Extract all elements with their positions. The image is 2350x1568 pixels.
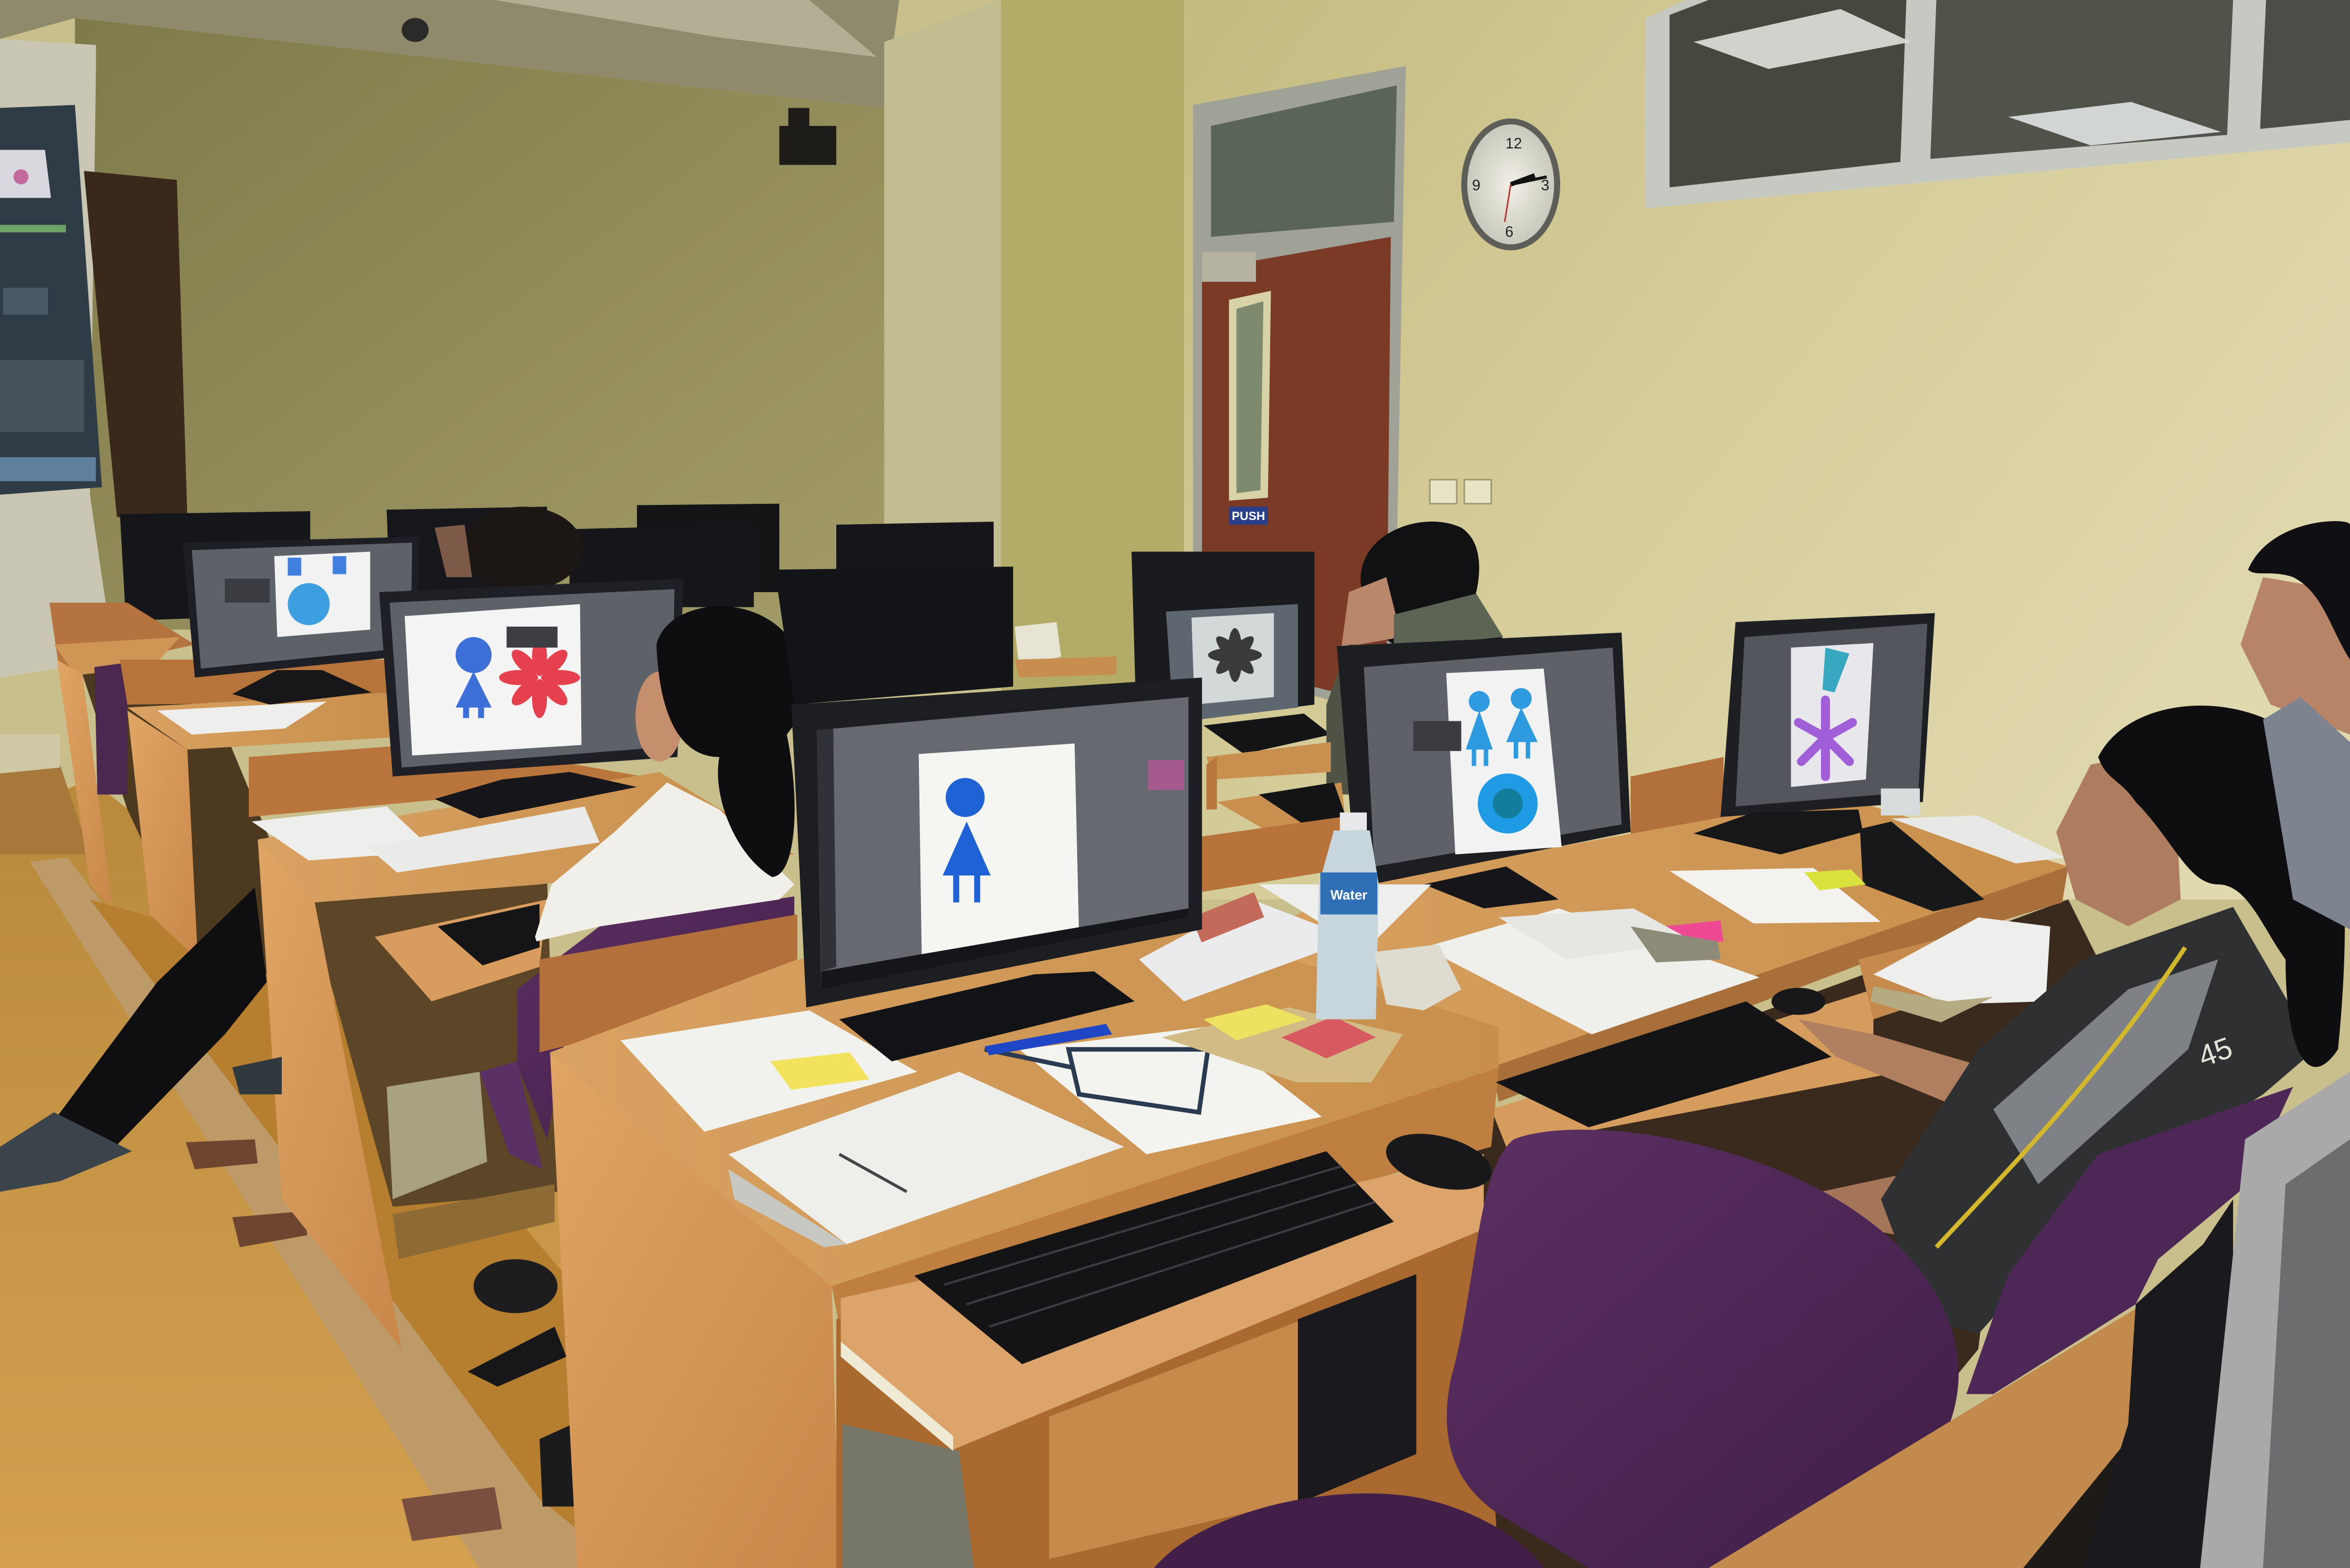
monitor: figure and red flower [379, 579, 684, 818]
printed booklet [1139, 884, 1431, 1001]
under-desk shadow, left rows [83, 660, 558, 1207]
monitor: right with figures and blue flower [1337, 632, 1631, 908]
area under main desk [836, 1184, 1499, 1568]
monitor: blue flower [183, 537, 420, 705]
back center person head [435, 506, 583, 591]
woman in front right [1799, 706, 2345, 1334]
glasses [985, 1050, 1208, 1112]
main desk partition [539, 915, 797, 1052]
wall clock: 3 [1541, 177, 1549, 194]
woman in white shirt [535, 606, 814, 941]
front purple chairs [1154, 1087, 2293, 1568]
front keyboard [914, 1151, 1394, 1364]
door and frame [1193, 66, 1406, 720]
door sign [1229, 506, 1268, 525]
pens [985, 1024, 1112, 1055]
middle row monitors [775, 551, 1331, 754]
person at back left: legs and shoe [0, 887, 282, 1192]
speaker and camera [401, 18, 836, 165]
middle desk behind monitor [1206, 742, 1346, 835]
main monitor [791, 677, 1202, 1062]
main desk top [550, 929, 1499, 1568]
foreground partition and monitor [1709, 1072, 2350, 1568]
computer tower [1298, 1274, 1416, 1504]
light switches [1430, 480, 1491, 504]
notebook with sticky note [1161, 1005, 1403, 1082]
floor [0, 734, 629, 1568]
wall clock: 6 [1505, 224, 1513, 240]
wall clock [1461, 119, 1560, 250]
water bottle: Water [1330, 888, 1367, 903]
papers on main desk [620, 1010, 1322, 1247]
wall clock: 9 [1472, 177, 1480, 194]
water bottle [1316, 812, 1379, 1019]
chair behind woman [468, 896, 794, 1506]
keyboard tray [841, 1124, 1497, 1451]
desk row 1 [50, 603, 195, 907]
window [1645, 0, 2350, 209]
second keyboard [1496, 988, 1831, 1127]
man far right [2241, 521, 2350, 929]
desk row 3 [249, 742, 794, 1349]
woman in front right: 45 [2194, 1031, 2237, 1074]
projection screen [0, 39, 114, 677]
back row monitors [120, 504, 994, 620]
man at back center [1327, 522, 1505, 794]
door sign: PUSH [1232, 509, 1265, 523]
monitor: far right [1694, 613, 1935, 855]
mouse [1380, 1124, 1497, 1200]
right partition [1202, 757, 1723, 892]
cloth [1374, 944, 1461, 1010]
curtain [84, 171, 187, 517]
wall clock: 12 [1505, 135, 1522, 152]
right desk papers and keyboard [1424, 789, 2065, 1034]
right desk top [1169, 802, 2098, 1568]
desk row 2 [120, 660, 390, 960]
